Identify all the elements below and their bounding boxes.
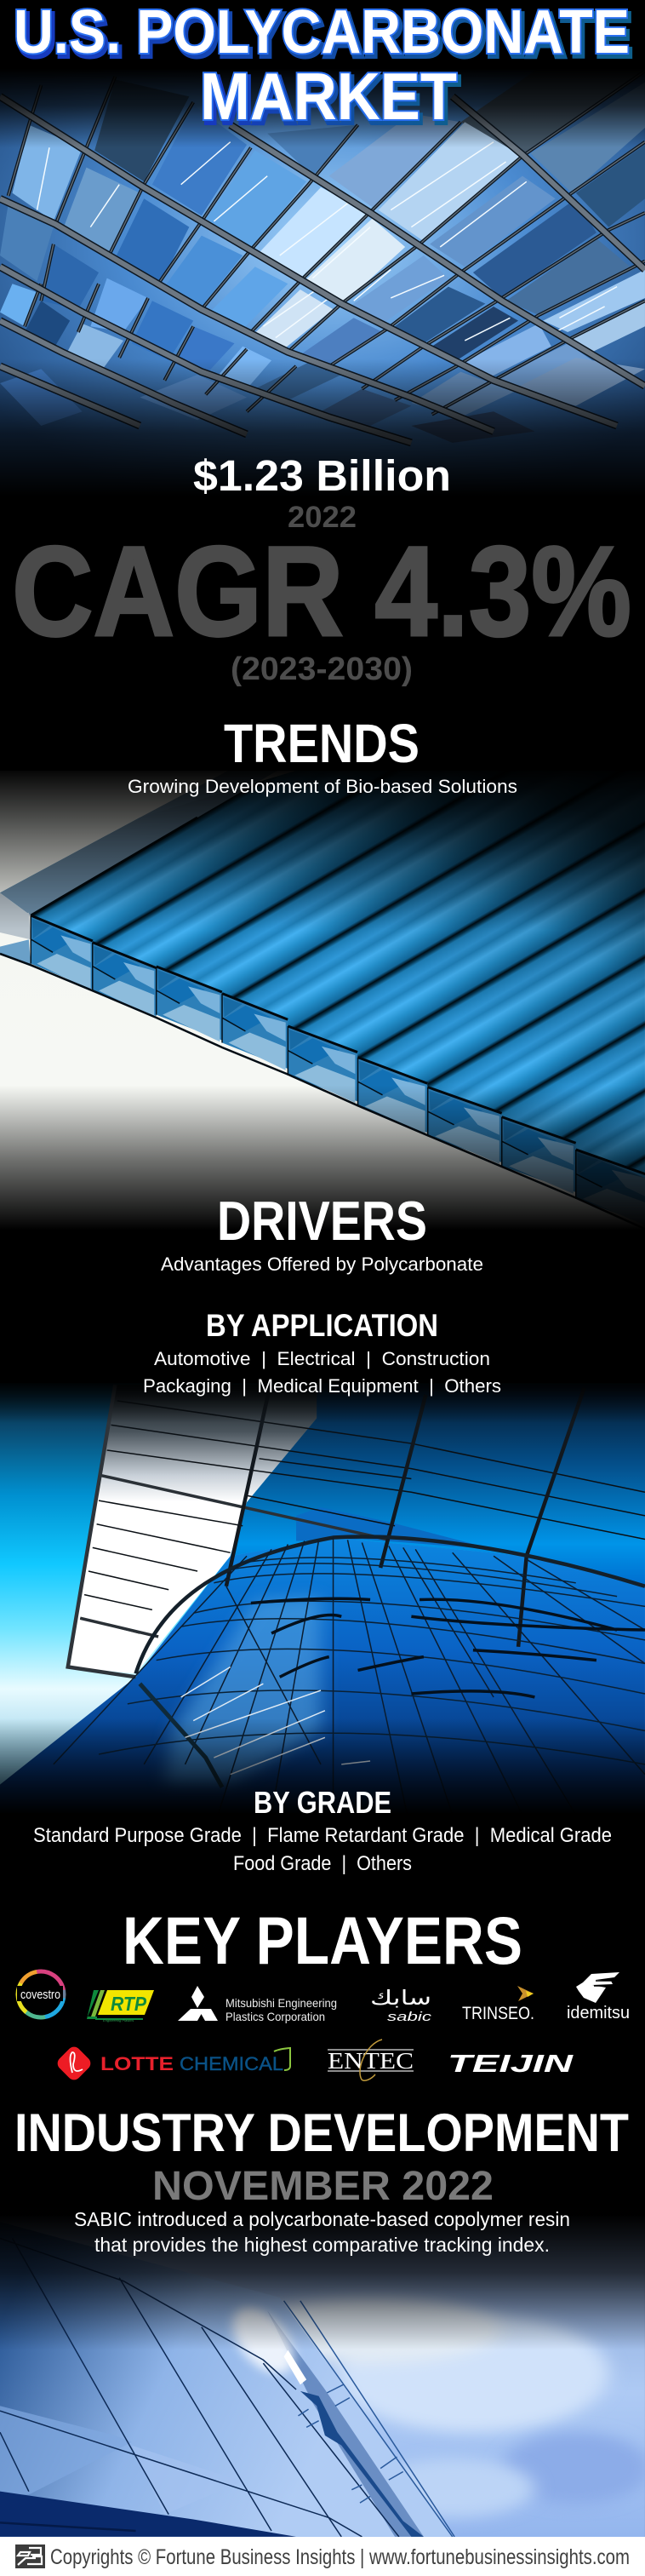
heading: by grade: BY GRADE xyxy=(254,1785,391,1820)
photo: multiwall polycarbonate sheet xyxy=(0,760,645,1235)
logo: Entec xyxy=(328,2040,414,2080)
heading: by application: BY APPLICATION xyxy=(206,1308,438,1343)
application list line two: Packaging | Medical Equipment | Others xyxy=(143,1375,501,1397)
logo: RTP: Engineering Plastics xyxy=(103,2018,134,2022)
logo: Lotte Chemical xyxy=(54,2044,290,2083)
logo: Idemitsu xyxy=(567,1972,630,2022)
trend description: Growing Development of Bio-based Solutions xyxy=(128,776,517,797)
logo: Idemitsu: idemitsu xyxy=(567,2004,630,2022)
base year: 2022 xyxy=(288,501,357,534)
heading: drivers: DRIVERS xyxy=(217,1190,427,1252)
development description line one: SABIC introduced a polycarbonate-based copolymer resin xyxy=(74,2208,570,2230)
title: MARKET xyxy=(203,62,459,137)
application list line one: Automotive | Electrical | Construction xyxy=(154,1348,490,1369)
logo: SABIC xyxy=(370,1986,432,2024)
driver description: Advantages Offered by Polycarbonate xyxy=(161,1254,483,1275)
logo: Entec: ENTEC xyxy=(328,2048,414,2074)
logo: SABIC: sabic xyxy=(387,2010,432,2024)
logo: Teijin: TEIJIN xyxy=(448,2051,574,2078)
title: MARKET xyxy=(200,59,457,134)
logo: RTP: RTP xyxy=(111,1993,147,2015)
logo: covestro xyxy=(9,1962,73,2027)
photo: curved glass building xyxy=(0,1380,645,1816)
logo: Mitsubishi Engineering Plastics: Plastics Corporation xyxy=(225,2010,325,2023)
logo: RTP xyxy=(87,1990,154,2022)
logo: Lotte Chemical: LOTTE xyxy=(100,2053,174,2074)
logo: Mitsubishi Engineering Plastics xyxy=(178,1986,337,2023)
logo: SABIC: سابك xyxy=(370,1986,431,2010)
logo: Mitsubishi Engineering Plastics: Mitsubishi Engineering xyxy=(225,1996,337,2010)
title xyxy=(14,0,632,137)
logo: covestro: covestro xyxy=(20,1988,60,2002)
forecast period: (2023-2030) xyxy=(231,651,413,687)
logo: Lotte Chemical: CHEMICAL xyxy=(180,2053,283,2074)
grade list line two: Food Grade | Others xyxy=(233,1852,412,1875)
logo: Trinseo xyxy=(462,1986,534,2023)
market size value: $1.23 Billion xyxy=(193,451,451,500)
logo: Trinseo: TRINSEO. xyxy=(462,2004,534,2023)
hero photo: glass and steel roof xyxy=(0,0,645,528)
photo: glass facade against clouds xyxy=(0,2214,645,2538)
icon: Fortune Business Insights logo xyxy=(15,2544,45,2568)
development description line two: that provides the highest comparative tracking index. xyxy=(94,2234,550,2256)
footer bar xyxy=(0,2537,645,2576)
heading: trends: TRENDS xyxy=(224,713,420,774)
development date: NOVEMBER 2022 xyxy=(152,2164,494,2209)
heading: key players: KEY PLAYERS xyxy=(123,1902,522,1978)
grade list line one: Standard Purpose Grade | Flame Retardant Grade | Medical Grade xyxy=(33,1824,612,1847)
